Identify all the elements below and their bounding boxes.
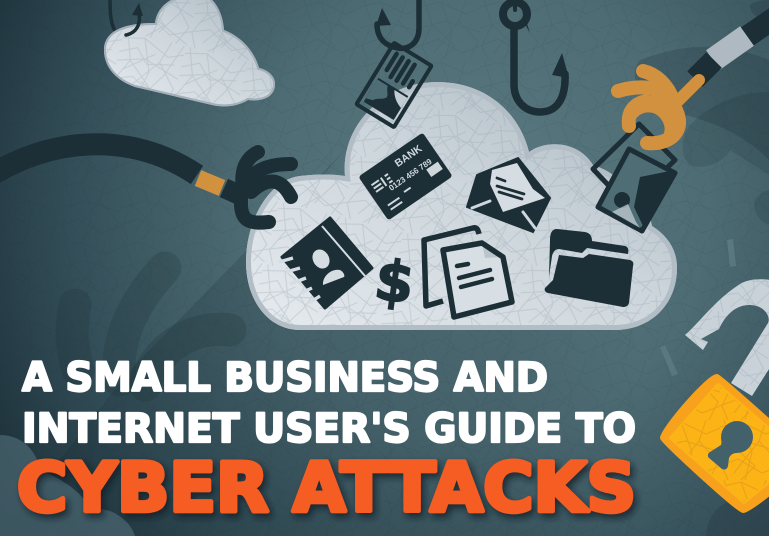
icon: documents [424, 228, 512, 317]
icon: fish hook with ID card [356, 0, 432, 127]
icon: envelope with letter [467, 158, 550, 232]
title line 3: CYBER ATTACKS [17, 449, 636, 528]
background cloud shape: bottom left [0, 435, 135, 536]
icon: ID card [356, 43, 432, 127]
right arm with hand [618, 14, 769, 143]
icon: folder [545, 229, 633, 307]
big cloud [246, 82, 677, 330]
padlock [662, 279, 769, 511]
title line 1: A SMALL BUSINESS AND [22, 355, 548, 401]
icon: bank card [358, 133, 453, 220]
small cloud [104, 0, 275, 106]
hand shadow on the background [72, 268, 230, 385]
left arm with hand [0, 144, 291, 223]
background cloud shape: bottom right [706, 490, 769, 536]
padlock shackle [685, 279, 769, 396]
padlock body [662, 376, 769, 511]
icon: dollar sign: $ [371, 248, 418, 317]
icon: fish hook [503, 0, 569, 112]
decorative dashes [660, 239, 736, 376]
icon: address book [279, 218, 372, 308]
icon: bank card: 0123 456 789 [387, 157, 434, 193]
icon: photographs [593, 124, 675, 231]
title [17, 355, 636, 528]
long shadow of the cloud [0, 150, 640, 536]
icon: fish hook on small cloud [110, 0, 143, 35]
icon: bank card: BANK [393, 142, 425, 170]
title line 2: INTERNET USER'S GUIDE TO [22, 406, 636, 452]
